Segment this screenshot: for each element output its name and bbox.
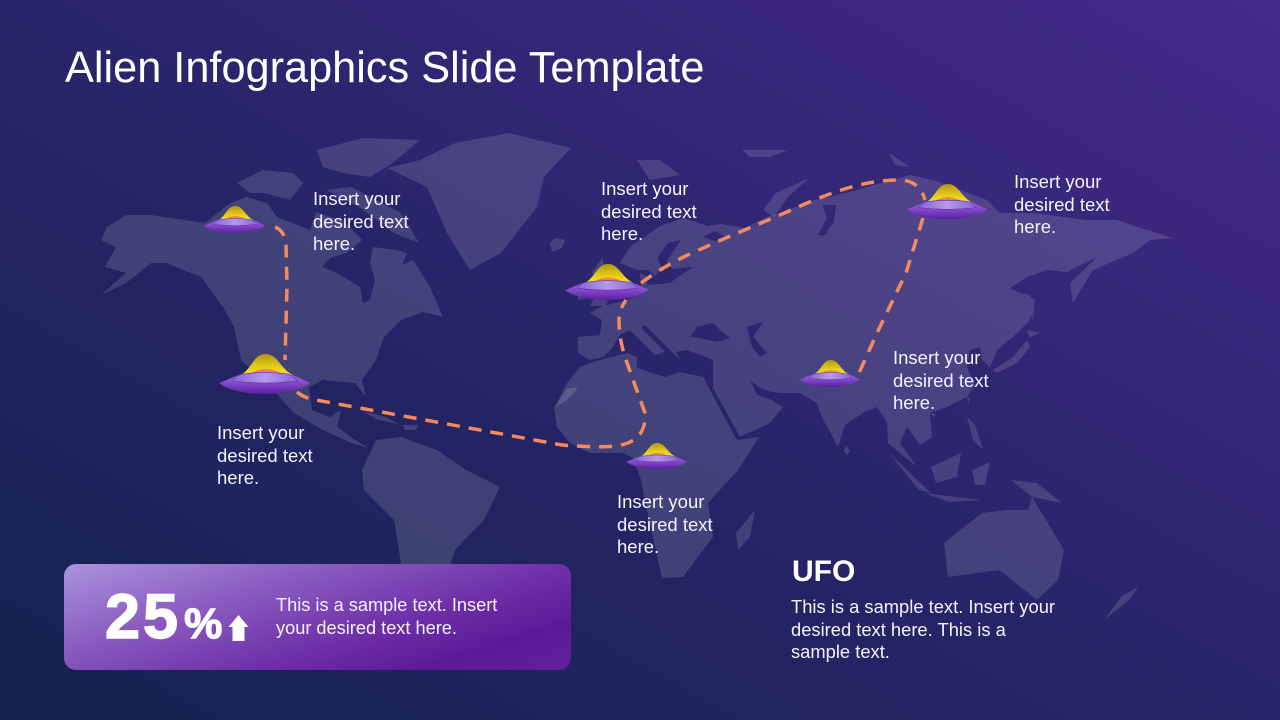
- route: Mexico to Africa to Europe: [297, 300, 645, 447]
- icon: UFO over Mexico: [219, 354, 310, 394]
- label: Europe: Insert your: [601, 178, 688, 199]
- Western Sahara highlight: [555, 388, 578, 407]
- label: Russia: Insert your: [1014, 171, 1101, 192]
- UFO description: [791, 596, 1055, 662]
- New Zealand: [1104, 587, 1138, 620]
- label: Europe: [601, 178, 697, 244]
- statistic value: 25%: [105, 582, 222, 652]
- label: Russia: desired text: [1014, 194, 1110, 214]
- UFO description: sample text.: [791, 641, 890, 662]
- Greenland: [387, 133, 571, 270]
- statistic description: [276, 595, 498, 638]
- label: Africa: desired text: [617, 514, 713, 534]
- world map: [101, 133, 1173, 620]
- icon: up arrow: [228, 615, 248, 641]
- label: India: [893, 347, 989, 413]
- label: Mexico: Insert your: [217, 422, 304, 443]
- label: Europe: desired text: [601, 200, 697, 222]
- Iceland: [550, 238, 565, 252]
- label: Mexico: here.: [217, 467, 259, 488]
- title: Alien Infographics Slide Template: [65, 44, 704, 92]
- UFO description: desired text here. This is a: [791, 618, 1006, 640]
- route: Alaska to Mexico: [275, 227, 287, 360]
- panel: 25% statistic: [64, 564, 571, 670]
- label: Alaska: Insert your: [313, 188, 400, 209]
- UFO heading: UFO: [792, 555, 855, 588]
- label: Africa: Insert your: [617, 491, 704, 512]
- icon: UFO over India: [800, 360, 860, 387]
- route: Europe to Russia: [641, 180, 925, 283]
- statistic description: This is a sample text. Insert: [276, 595, 497, 615]
- label: Europe: here.: [601, 223, 643, 244]
- label: Mexico: [217, 422, 313, 488]
- icon: UFO over Africa: [626, 443, 687, 469]
- label: India: Insert your: [893, 347, 980, 368]
- label: Alaska: here.: [313, 233, 355, 254]
- statistic description: your desired text here.: [276, 618, 457, 638]
- Madagascar: [736, 510, 755, 550]
- icon: UFO over Russia: [907, 184, 987, 219]
- Caribbean islands: [362, 411, 418, 430]
- label: Alaska: [313, 188, 409, 254]
- Southeast Asian islands: [844, 397, 1062, 503]
- label: India: here.: [893, 392, 935, 413]
- Africa: [554, 353, 759, 578]
- Japan and Sakhalin: [993, 297, 1040, 373]
- North America: [101, 197, 443, 448]
- label: Africa: [617, 491, 713, 557]
- UFO description: This is a sample text. Insert your: [791, 596, 1055, 617]
- label: Africa: here.: [617, 536, 659, 557]
- label: Russia: here.: [1014, 216, 1056, 237]
- label: India: desired text: [893, 370, 989, 390]
- label: Mexico: desired text: [217, 444, 313, 466]
- icon: UFO over Europe: [565, 264, 649, 300]
- South America: [362, 437, 500, 600]
- icon: UFO over Alaska: [204, 206, 265, 233]
- Great Britain and Ireland: [578, 258, 612, 306]
- label: Alaska: desired text: [313, 210, 409, 232]
- Australia: [944, 497, 1064, 600]
- Arctic Eurasian islands: [637, 150, 910, 217]
- Eurasia: [578, 175, 1173, 467]
- route: Russia to India: [859, 218, 923, 373]
- label: Russia: [1014, 171, 1110, 237]
- Arctic islands: [237, 138, 420, 243]
